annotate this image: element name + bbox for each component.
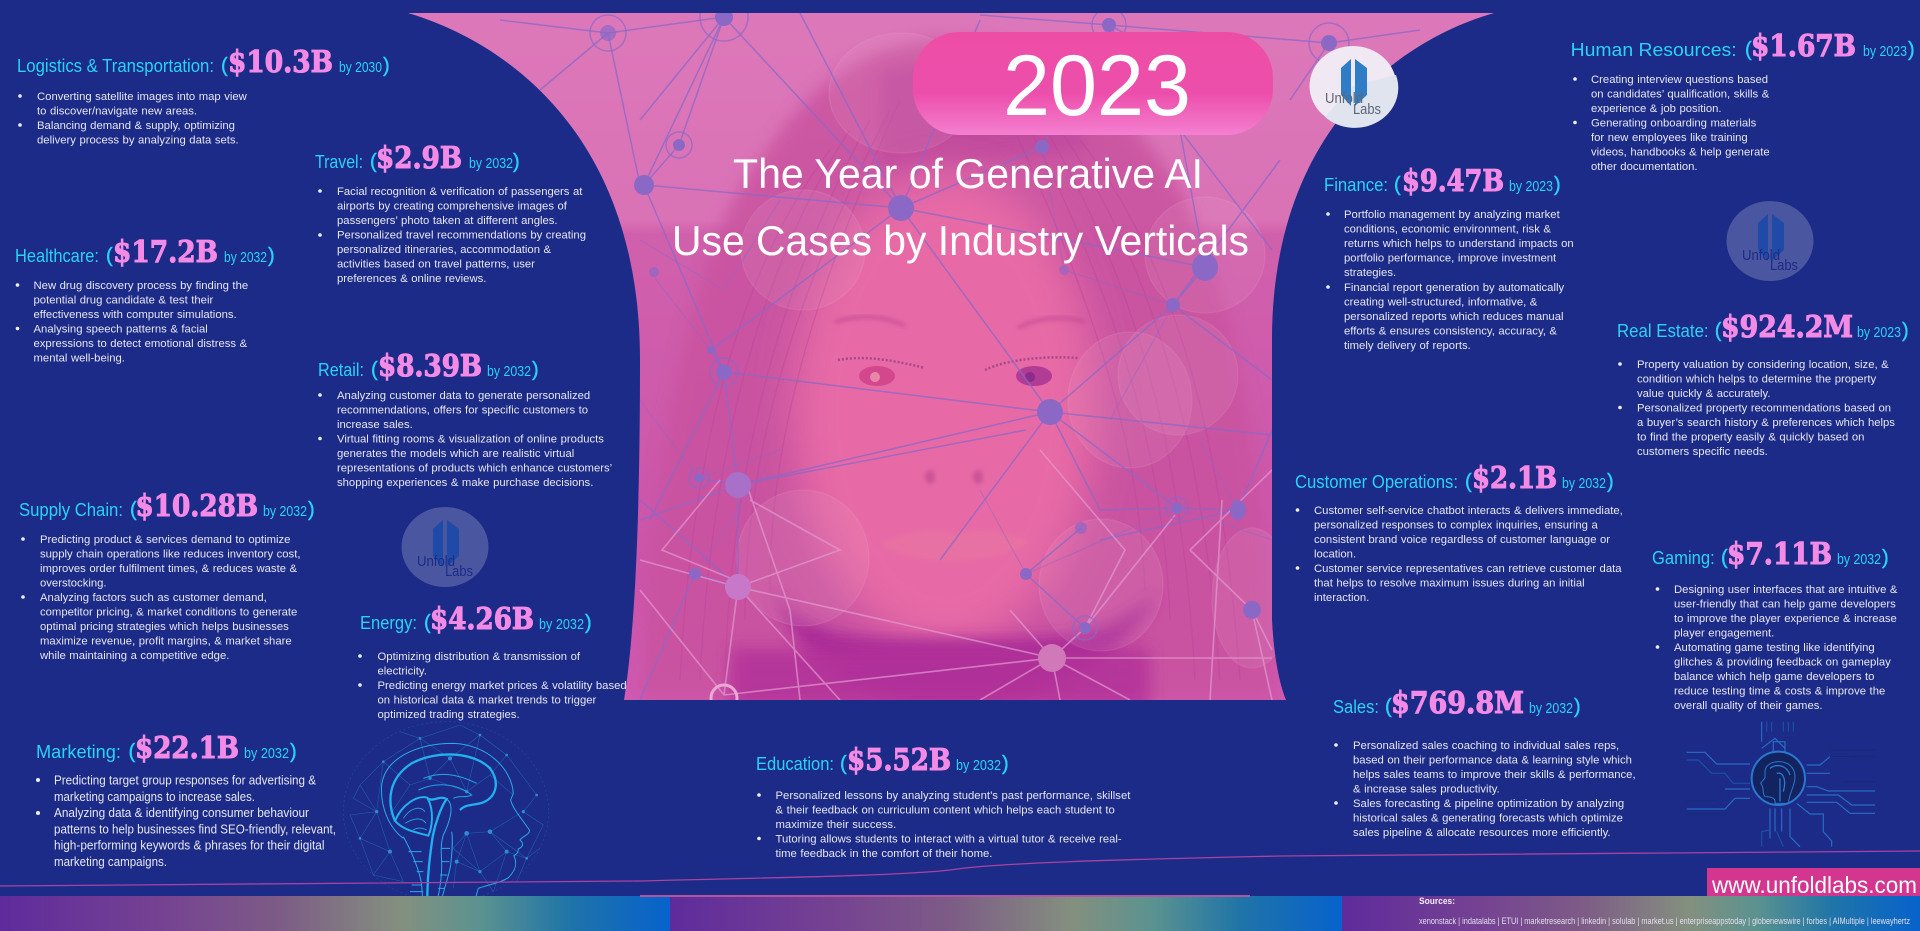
panel: Sales [1333, 686, 1636, 839]
panel: Finance: Financial report generation by automatically [1344, 282, 1564, 294]
panel: Gaming: overall quality of their games. [1674, 700, 1823, 712]
panel: Travel: ( [370, 151, 377, 173]
panel: Travel: $2.9B [376, 141, 462, 176]
panel: Marketing: Analyzing data & identifying consumer behaviour [54, 805, 310, 820]
panel: Finance: Finance: [1324, 175, 1388, 195]
panel: Education: Tutoring allows students to interact with a virtual tutor & receive real- [776, 834, 1122, 846]
panel: Travel: activities based on travel patterns, user [337, 258, 535, 270]
logo: Unfold Labs watermark left: Unfold [417, 553, 455, 570]
panel: Retail: Virtual fitting rooms & visualization of online products [337, 434, 604, 446]
panel: Finance: $9.47B [1402, 164, 1504, 199]
sources heading: Sources: [1419, 896, 1455, 907]
panel: Energy: optimized trading strategies. [378, 709, 520, 721]
panel: Energy: by 2032 [539, 617, 584, 633]
panel: Finance: conditions, economic environment, risk & [1344, 224, 1551, 236]
panel: Education: & their feedback on curriculum content which helps each student to [776, 804, 1115, 816]
panel: Human Resources: other documentation. [1591, 161, 1698, 173]
panel: Real Estate: value quickly & accurately. [1637, 388, 1770, 400]
eyebrows, eyes, nose and lips [835, 314, 1084, 484]
panel: Energy: Optimizing distribution & transmission of [378, 651, 581, 663]
title: Use Cases by Industry Verticals: Use Cases by Industry Verticals [672, 217, 1249, 264]
panel: Customer Operations: personalized responses to complex inquiries, ensuring a [1314, 520, 1598, 532]
panel: Supply Chain: supply chain operations like reduces inventory cost, [40, 548, 300, 560]
panel: Education: ) [1002, 753, 1009, 775]
panel: Real Estate: $924.2M [1721, 310, 1853, 345]
panel: Human Resources: by 2023 [1863, 44, 1907, 60]
panel: Real Estate: to find the property easily & quickly based on [1637, 432, 1864, 444]
panel: Energy: ) [585, 612, 592, 634]
panel: Healthcare: effectiveness with computer simulations. [34, 309, 237, 321]
panel: Finance: ( [1394, 174, 1401, 196]
panel: Logistics & Transportation: by 2030 [339, 60, 382, 76]
panel: Travel: Travel: [315, 152, 363, 172]
panel: Travel: ) [513, 151, 520, 173]
panel: Marketing: ( [128, 741, 136, 763]
panel: Real Estate [1617, 310, 1909, 458]
panel: Education: Education: [756, 754, 834, 774]
panel: Human Resources: on candidates’ qualification, skills & [1591, 88, 1770, 100]
panel: Marketing [36, 731, 336, 869]
panel: Supply Chain: overstocking. [40, 578, 107, 590]
panel: Customer Operations [1295, 461, 1623, 604]
panel: Finance: portfolio performance, improve investment [1344, 252, 1557, 264]
panel: Finance: ) [1554, 174, 1561, 196]
panel: Human Resources: for new employees like training [1591, 132, 1748, 144]
panel: Sales: & increase sales productivity. [1353, 784, 1500, 796]
panel: Logistics & Transportation: to discover/navigate new areas. [37, 106, 197, 118]
panel: Travel: passengers’ photo taken at different angles. [337, 215, 558, 227]
website link box: www.unfoldlabs.com [1711, 872, 1917, 898]
panel: Gaming: reduce testing time & costs & improve the [1674, 686, 1885, 698]
panel: Logistics & Transportation: Logistics & Transportation: [17, 56, 214, 76]
panel: Supply Chain: while maintaining a competitive edge. [39, 650, 229, 662]
panel: Education [756, 743, 1131, 860]
panel: Travel: Facial recognition & verification of passengers at [337, 186, 583, 198]
panel: Marketing: $22.1B [135, 731, 239, 766]
panel: Real Estate: ( [1715, 320, 1722, 342]
panel: Marketing: high-performing keywords & phrases for their digital [54, 838, 325, 852]
panel: Sales: helps sales teams to improve their skills & performance, [1353, 769, 1636, 781]
panel: Sales: historical sales & generating forecasts which optimize [1353, 812, 1623, 824]
translucent bubbles [737, 33, 1292, 668]
title pill: 2023 [913, 32, 1273, 135]
panel: Travel: personalized itineraries, accommodation & [337, 244, 552, 256]
panel: Education: ( [840, 753, 847, 775]
panel: Marketing: Marketing: [36, 742, 121, 762]
panel: Gaming: Designing user interfaces that are intuitive & [1674, 584, 1898, 596]
panel: Finance: Portfolio management by analyzing market [1344, 209, 1561, 221]
panel: Retail [318, 349, 612, 489]
panel: Healthcare: expressions to detect emotional distress & [34, 338, 248, 350]
panel: Logistics & Transportation: Balancing demand & supply, optimizing [37, 120, 235, 132]
panel: Finance: creating well-structured, informative, & [1344, 296, 1538, 308]
panel: Energy: Predicting energy market prices & volatility based [378, 680, 627, 692]
panel: Logistics & Transportation: ) [383, 55, 390, 77]
panel: Energy: electricity. [378, 666, 427, 678]
panel: Logistics & Transportation: $10.3B [228, 45, 333, 80]
panel: Supply Chain: ) [308, 499, 315, 521]
panel: Customer Operations: interaction. [1314, 592, 1369, 604]
panel: Marketing: marketing campaigns to increase sales. [54, 789, 255, 804]
panel: Retail: ( [371, 359, 378, 381]
title: The Year of Generative AI: The Year of Generative AI [733, 150, 1203, 197]
panel: Sales: sales pipeline & allocate resources more efficiently. [1353, 827, 1611, 839]
panel: Travel: preferences & online reviews. [337, 273, 486, 285]
panel: Education: $5.52B [847, 743, 951, 778]
icon: brain network head [343, 722, 549, 902]
icon: circuit head [1687, 722, 1875, 847]
panel: Supply Chain: competitor pricing, & market conditions to generate [40, 606, 297, 618]
panel: Supply Chain: Analyzing factors such as customer demand, [40, 592, 267, 604]
panel: Healthcare: New drug discovery process by finding the [34, 280, 248, 292]
panel: Healthcare: Healthcare: [15, 246, 99, 266]
panel: Gaming: Automating game testing like identifying [1674, 642, 1875, 654]
panel: Healthcare: mental well-being. [34, 352, 125, 364]
panel: Human Resources: Generating onboarding materials [1591, 118, 1757, 130]
panel: Human Resources [1571, 29, 1915, 173]
panel: Supply Chain: ( [130, 499, 137, 521]
panel: Real Estate: a buyer’s search history & preferences which helps [1637, 417, 1895, 429]
panel: Healthcare: ( [106, 245, 113, 267]
panel: Sales: Sales: [1333, 697, 1379, 717]
panel: Customer Operations: that helps to resolve maximum issues during an initial [1314, 578, 1585, 590]
panel: Gaming: user-friendly that can help game developers [1674, 598, 1896, 610]
panel: Gaming: ( [1721, 547, 1728, 569]
panel: Supply Chain: by 2032 [263, 504, 307, 520]
panel: Supply Chain: optimal pricing strategies which helps businesses [40, 621, 289, 633]
panel: Energy: Energy: [360, 613, 417, 633]
panel: Human Resources: Human Resources: [1571, 40, 1737, 60]
panel: Energy [358, 602, 627, 721]
panel: Retail: by 2032 [487, 364, 531, 380]
title pill: 2023: 2023 [1003, 38, 1191, 134]
panel: Healthcare [15, 235, 275, 364]
panel: Gaming [1652, 537, 1898, 712]
panel: Healthcare: Analysing speech patterns & facial [34, 324, 208, 336]
panel: Gaming: by 2032 [1837, 552, 1881, 568]
panel: Travel [315, 141, 586, 285]
logo: Unfold Labs watermark right [1726, 201, 1814, 281]
panel: Logistics & Transportation [17, 45, 390, 146]
panel: Customer Operations: Customer Operations: [1295, 472, 1458, 492]
network edges lower [640, 450, 1272, 700]
panel: Real Estate: by 2023 [1857, 325, 1901, 341]
logo: Unfold Labs top: Labs [1353, 101, 1381, 118]
panel: Real Estate: condition which helps to determine the property [1637, 374, 1876, 386]
panel: Human Resources: $1.67B [1751, 29, 1856, 64]
panel: Energy: ( [424, 612, 431, 634]
footer gradient band [0, 895, 1920, 931]
network edges upper [500, 13, 1420, 700]
panel: Finance: timely delivery of reports. [1344, 340, 1471, 352]
panel: Real Estate: customers specific needs. [1637, 446, 1768, 458]
panel: Healthcare: by 2032 [224, 250, 267, 266]
panel: Sales: $769.8M [1391, 686, 1524, 721]
panel: Human Resources: Creating interview questions based [1591, 74, 1768, 86]
panel: Marketing: by 2032 [244, 746, 289, 762]
panel: Retail: recommendations, offers for specific customers to [337, 404, 588, 416]
panel: Retail: shopping experiences & make purchase decisions. [337, 477, 593, 489]
panel: Energy: on historical data & market trends to trigger [378, 694, 597, 706]
panel: Retail: Analyzing customer data to generate personalized [337, 390, 590, 402]
panel: Real Estate: Real Estate: [1617, 321, 1709, 341]
panel: Customer Operations: $2.1B [1472, 461, 1557, 496]
panel: Retail: Retail: [318, 360, 364, 380]
panel: Finance: returns which helps to understand impacts on [1344, 238, 1574, 250]
panel: Travel: by 2032 [469, 156, 513, 172]
panel: Education: time feedback in the comfort of their home. [776, 848, 992, 860]
panel: Retail: generates the models which are realistic virtual [337, 448, 574, 460]
panel: Marketing: marketing campaigns. [54, 854, 167, 869]
panel: Marketing: patterns to help businesses find SEO-friendly, relevant, [54, 822, 336, 836]
panel: Gaming: to improve the player experience & increase [1674, 613, 1897, 625]
panel: Logistics & Transportation: delivery process by analyzing data sets. [37, 134, 239, 146]
panel: Finance: strategies. [1344, 267, 1396, 279]
panel: Supply Chain: Supply Chain: [19, 500, 123, 520]
panel: Customer Operations: Customer self-service chatbot interacts & delivers immediate, [1314, 505, 1623, 517]
panel: Human Resources: ) [1908, 39, 1915, 61]
panel: Retail: representations of products which enhance customers’ [337, 462, 612, 474]
panel: Gaming: $7.11B [1727, 537, 1832, 572]
panel: Travel: airports by creating comprehensive images of [337, 200, 568, 212]
panel: Real Estate: ) [1902, 320, 1909, 342]
logo: Unfold Labs watermark right: Unfold [1742, 247, 1780, 264]
panel: Healthcare: ) [268, 245, 275, 267]
panel: Human Resources: experience & job position. [1591, 103, 1722, 115]
panel: Education: Personalized lessons by analyzing student’s past performance, skillset [776, 790, 1131, 802]
hero image: face with neural network [400, 0, 1500, 711]
panel: Gaming: player engagement. [1674, 628, 1774, 640]
panel: Supply Chain: improves order fulfilment times, & reduces waste & [40, 563, 298, 575]
panel: Marketing: Predicting target group responses for advertising & [54, 772, 316, 788]
panel: Supply Chain: $10.28B [136, 489, 258, 524]
logo: Unfold Labs top [1310, 46, 1398, 128]
panel: Sales: ( [1385, 696, 1392, 718]
decorative-free divider line: thin pink wave [0, 851, 1920, 886]
panel: Marketing: ) [290, 741, 297, 763]
panel: Gaming: glitches & providing feedback on gameplay [1674, 656, 1891, 668]
panel: Retail: ) [532, 359, 539, 381]
logo: Unfold Labs watermark left [402, 507, 488, 587]
logo: Unfold Labs top: Unfold [1325, 90, 1363, 107]
panel: Finance [1324, 164, 1574, 352]
panel: Customer Operations: Customer service representatives can retrieve customer data [1314, 563, 1622, 575]
panel: Supply Chain: maximize revenue, profit margins, & market share [40, 636, 292, 648]
panel: Gaming: Gaming: [1652, 548, 1715, 568]
panel: Logistics & Transportation: Converting satellite images into map view [37, 91, 248, 103]
panel: Sales: ) [1574, 696, 1581, 718]
panel: Real Estate: Personalized property recommendations based on [1637, 402, 1891, 414]
panel: Finance: personalized reports which reduces manual [1344, 311, 1564, 323]
panel: Travel: Personalized travel recommendations by creating [337, 230, 586, 242]
panel: Retail: increase sales. [337, 419, 413, 431]
panel: Customer Operations: consistent brand voice regardless of customer language or [1314, 534, 1610, 546]
panel: Energy: $4.26B [430, 602, 534, 637]
panel: Customer Operations: location. [1314, 548, 1356, 560]
panel: Real Estate: Property valuation by considering location, size, & [1637, 359, 1889, 371]
panel: Sales: Sales forecasting & pipeline optimization by analyzing [1353, 798, 1624, 810]
panel: Healthcare: $17.2B [113, 235, 218, 270]
panel: Human Resources: ( [1745, 39, 1752, 61]
panel: Supply Chain: Predicting product & services demand to optimize [40, 534, 290, 546]
panel: Retail: $8.39B [378, 349, 482, 384]
panel: Education: by 2032 [956, 758, 1001, 774]
panel: Gaming: balance which help game developers to [1674, 671, 1874, 683]
panel: Gaming: ) [1882, 547, 1889, 569]
panel: Sales: based on their performance data & learning style which [1353, 754, 1632, 766]
panel: Finance: efforts & ensures consistency, accuracy, & [1344, 326, 1557, 338]
panel: Healthcare: potential drug candidate & test their [34, 294, 213, 306]
logo: Unfold Labs watermark right: Labs [1770, 257, 1798, 274]
panel: Supply Chain [19, 489, 315, 662]
hair strands [770, 159, 1112, 488]
panel: Customer Operations: ) [1607, 471, 1614, 493]
panel: Sales: Personalized sales coaching to individual sales reps, [1353, 740, 1619, 752]
panel: Education: maximize their success. [776, 819, 896, 831]
panel: Sales: by 2032 [1529, 701, 1573, 717]
network nodes [600, 8, 1337, 634]
panel: Customer Operations: ( [1465, 471, 1472, 493]
logo: Unfold Labs watermark left: Labs [445, 563, 473, 580]
panel: Logistics & Transportation: ( [221, 55, 228, 77]
panel: Finance: by 2023 [1509, 179, 1553, 195]
panel: Human Resources: videos, handbooks & help generate [1591, 146, 1770, 158]
panel: Customer Operations: by 2032 [1562, 476, 1606, 492]
